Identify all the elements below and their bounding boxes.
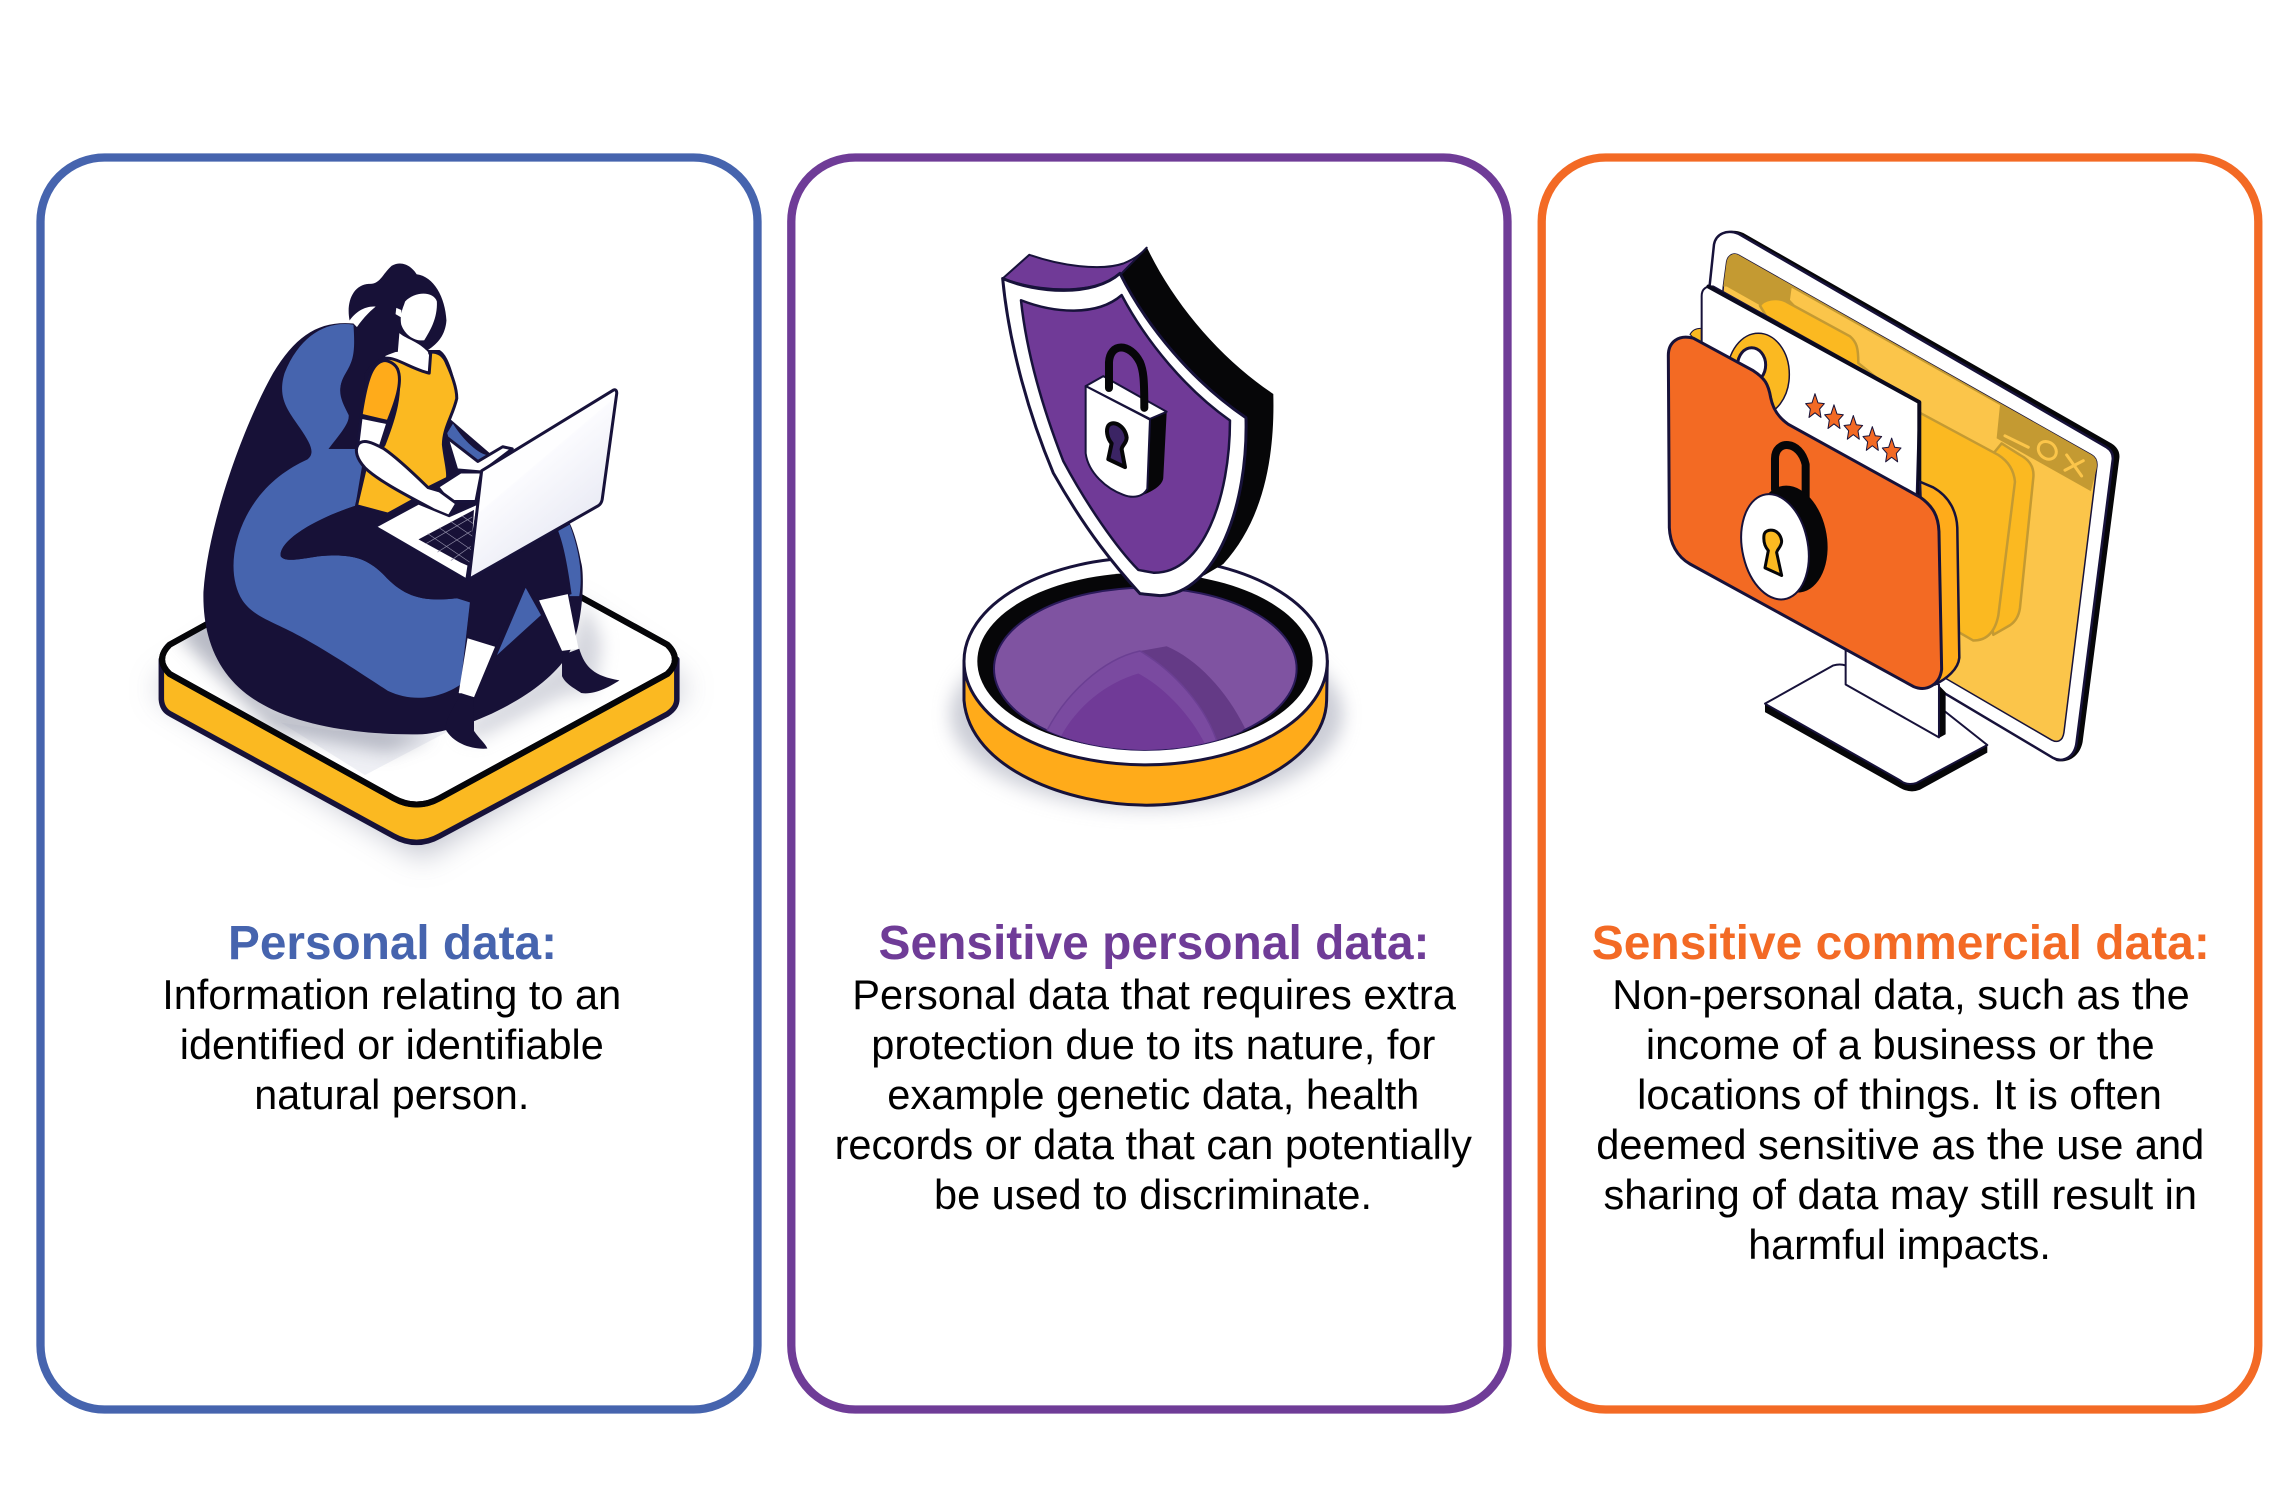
beanbag right highlights xyxy=(445,424,581,655)
window controls xyxy=(2005,436,2083,476)
back shoulder xyxy=(426,350,457,390)
laptop base xyxy=(376,504,478,579)
panel: sensitive commercial data xyxy=(1542,158,2258,1410)
body text: sensitive personal data: example genetic data, health xyxy=(887,1071,1419,1118)
shield front xyxy=(1003,273,1246,596)
shirt xyxy=(357,352,457,514)
card border: sensitive commercial data xyxy=(1542,158,2258,1410)
document xyxy=(1702,286,1919,497)
shield inner xyxy=(1021,295,1230,573)
body text: personal data: natural person. xyxy=(254,1071,529,1118)
monitor screen xyxy=(1720,254,2097,741)
platform side xyxy=(161,659,677,842)
body text: sensitive personal data xyxy=(835,971,1472,1218)
stand base top xyxy=(1765,664,1987,784)
card border: personal data xyxy=(40,158,758,1410)
lower legs xyxy=(459,594,578,697)
body text: sensitive personal data: be used to discriminate. xyxy=(934,1171,1372,1218)
arm xyxy=(358,417,388,447)
dish side xyxy=(964,661,1327,805)
dish rim xyxy=(964,558,1327,765)
platform top outline xyxy=(162,517,675,805)
panel: personal data xyxy=(40,158,758,1410)
neck xyxy=(397,333,429,373)
shield side xyxy=(1120,247,1273,576)
shadow on platform xyxy=(177,600,602,775)
dish shadow xyxy=(950,621,1343,807)
window title bar xyxy=(1723,254,2097,491)
icon: woman with laptop on beanbag xyxy=(153,264,690,857)
sleeve xyxy=(361,360,399,422)
keyboard xyxy=(419,510,474,567)
icon: locked folder in front of monitor xyxy=(1668,231,2119,791)
profile ring xyxy=(1727,333,1789,416)
panel: sensitive personal data xyxy=(791,158,1508,1410)
rear folder layer xyxy=(1920,482,1959,685)
body text: sensitive commercial data: sharing of data may still result in xyxy=(1604,1171,2197,1218)
beanbag xyxy=(203,323,583,734)
stand neck front xyxy=(1846,650,1939,737)
folder back tab xyxy=(1690,328,1703,348)
far arm xyxy=(438,432,512,501)
body text: sensitive personal data: records or data that can potentially xyxy=(835,1121,1472,1168)
heading: sensitive commercial data: Sensitive commercial data: xyxy=(1592,917,2210,970)
monitor stand base xyxy=(1765,664,1987,791)
stand neck xyxy=(1846,650,1946,737)
icon: shield with padlock over dish xyxy=(950,247,1343,807)
shield reflection xyxy=(1043,646,1245,758)
dish inner wall xyxy=(977,573,1313,750)
dish floor xyxy=(994,588,1297,750)
window highlight xyxy=(1790,288,2000,455)
body text: sensitive personal data: Personal data that requires extra xyxy=(852,971,1457,1018)
body text: personal data xyxy=(162,971,621,1118)
back files xyxy=(1973,443,2033,635)
platform top xyxy=(162,517,675,805)
hair xyxy=(329,264,446,449)
star rating xyxy=(1806,394,1901,462)
forearm xyxy=(356,442,457,516)
folder padlock xyxy=(1731,445,1838,608)
body text: personal data: Information relating to an xyxy=(162,971,621,1018)
monitor back edge xyxy=(1713,231,2119,761)
boots xyxy=(445,649,619,749)
body text: personal data: identified or identifiable xyxy=(180,1021,604,1068)
body text: sensitive commercial data: harmful impacts. xyxy=(1748,1221,2051,1268)
laptop screen xyxy=(469,390,617,579)
document top edge xyxy=(1708,287,1919,493)
shield top xyxy=(1003,248,1147,289)
body text: sensitive commercial data: income of a business or the xyxy=(1646,1021,2155,1068)
body text: sensitive commercial data: locations of things. It is often xyxy=(1637,1071,2162,1118)
body text: sensitive commercial data: Non-personal data, such as the xyxy=(1612,971,2190,1018)
profile hole xyxy=(1738,348,1766,382)
monitor frame xyxy=(1709,232,2113,760)
platform shadow xyxy=(153,609,690,857)
trousers xyxy=(281,506,572,647)
card border: sensitive personal data xyxy=(791,158,1508,1410)
heading: personal data: Personal data: xyxy=(228,917,557,970)
body text: sensitive personal data: protection due to its nature, for xyxy=(871,1021,1435,1068)
folder front xyxy=(1668,337,1942,688)
heading: sensitive personal data: Sensitive personal data: xyxy=(878,917,1430,970)
padlock xyxy=(1086,348,1167,497)
beanbag highlight xyxy=(234,324,470,698)
face xyxy=(396,294,437,340)
body text: sensitive commercial data: deemed sensitive as the use and xyxy=(1596,1121,2204,1168)
body text: sensitive commercial data xyxy=(1596,971,2204,1268)
